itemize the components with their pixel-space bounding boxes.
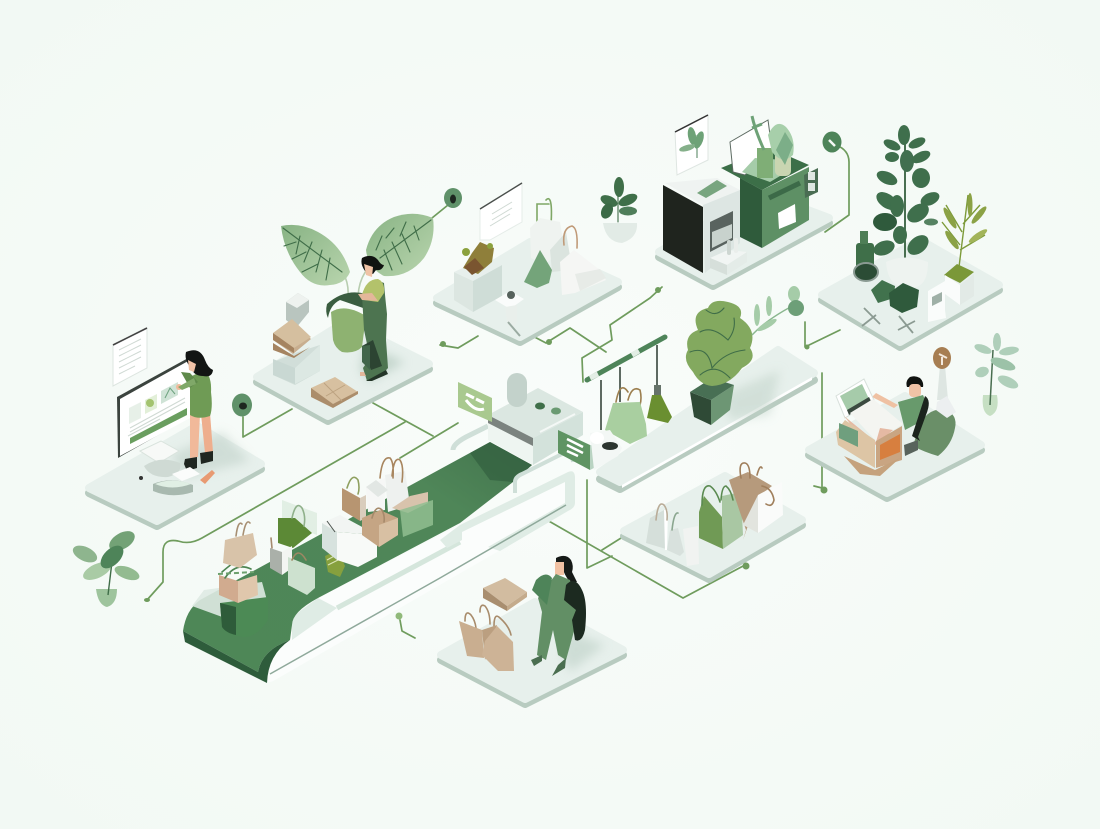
- white box: [322, 515, 377, 567]
- jars and plants on cabinet: [730, 116, 794, 182]
- platform: long rack platform: [587, 286, 814, 489]
- folded kraft stack: [273, 319, 311, 358]
- conveyor belt: [183, 373, 622, 683]
- desk items: [139, 441, 215, 495]
- monitor: [117, 357, 190, 458]
- icon: pot with plant on top: [599, 177, 639, 243]
- green bag in glass: [278, 500, 317, 548]
- node: small sprout: [396, 612, 402, 620]
- tan and white bag: [729, 463, 783, 540]
- lamp post: [933, 347, 956, 418]
- white bag cluster: [530, 199, 606, 295]
- framed plant picture: [675, 115, 708, 175]
- platform: bag display: [624, 463, 802, 579]
- green glass cube: [400, 500, 433, 537]
- connector lines: [147, 145, 849, 638]
- node: left ring: [232, 394, 252, 416]
- small tray: [710, 238, 747, 275]
- translucent pale bag: [288, 553, 315, 595]
- icon: potted sapling: [973, 333, 1020, 416]
- platform: desk worker: [809, 347, 981, 498]
- stone cube: [273, 293, 320, 385]
- icon: potted plant left: [70, 527, 141, 607]
- node: top ring: [444, 188, 462, 208]
- platform: machines: [659, 115, 829, 286]
- clothes rail: [587, 337, 665, 430]
- armchair: [913, 409, 956, 456]
- machine at belt head: [488, 373, 583, 465]
- dark green blocks and tools: [862, 280, 919, 333]
- potted lettuce plant: [686, 286, 804, 425]
- kraft shopping bags: [459, 605, 514, 671]
- person carrying plant: [358, 256, 388, 381]
- seated person: [872, 376, 929, 456]
- plant shadow: [722, 370, 780, 420]
- tan bag back left: [223, 522, 257, 568]
- green cylinder: [854, 231, 878, 281]
- display card: [480, 183, 522, 240]
- hanging bags: [605, 385, 672, 444]
- green bag: [699, 486, 743, 549]
- conveyor body: [262, 471, 575, 682]
- grey white bag: [270, 538, 292, 575]
- belt and curved base: [183, 442, 532, 672]
- kraft bag: [342, 477, 366, 521]
- conveyor rim line: [270, 505, 566, 674]
- olive crate: [325, 550, 345, 577]
- green cabinet: [721, 148, 818, 248]
- node: top right ring: [822, 132, 842, 152]
- potted monstera plant: [281, 214, 434, 352]
- tall dark plant: [871, 125, 942, 288]
- node: connector dots: [440, 287, 828, 570]
- left wrap panel: [192, 582, 268, 622]
- platform: packaging station: [437, 183, 618, 342]
- pale pad with black stone: [590, 430, 622, 470]
- conveyor mint right frame: [440, 471, 575, 551]
- sign: dark green: [558, 430, 617, 470]
- glass planter: [220, 597, 268, 637]
- platform: far-left monitor station: [89, 328, 261, 526]
- document card: [113, 328, 147, 386]
- person at monitor: [176, 350, 213, 471]
- laptop desk: [836, 379, 903, 476]
- node: lower left clip: [144, 598, 150, 602]
- platform: plant carrier station: [257, 214, 434, 421]
- belt shadow: [470, 442, 532, 482]
- conveyor mint left patch: [292, 598, 337, 640]
- white and grey bags: [646, 504, 699, 566]
- conveyor mint stripe: [337, 542, 460, 608]
- floor shadow: [170, 432, 250, 478]
- kraft bag with greens: [218, 558, 258, 603]
- sign: light green: [458, 382, 492, 422]
- floor shadow: [360, 345, 405, 382]
- person in green overalls: [531, 556, 586, 676]
- green triangle and stool: [495, 250, 552, 336]
- box with dried plant: [454, 242, 502, 312]
- olive plant on white box: [928, 193, 989, 322]
- kraft parcels: [362, 492, 428, 547]
- floor shadow: [562, 630, 605, 672]
- black panel kiosk: [663, 178, 740, 273]
- platform: bottom worker: [441, 556, 623, 704]
- white kraft-handled bags: [366, 458, 410, 512]
- kraft parcel: [311, 377, 358, 408]
- conveyor end rail: [515, 454, 573, 493]
- folded cloth stack: [483, 578, 527, 611]
- platform: herb lab: [822, 125, 999, 347]
